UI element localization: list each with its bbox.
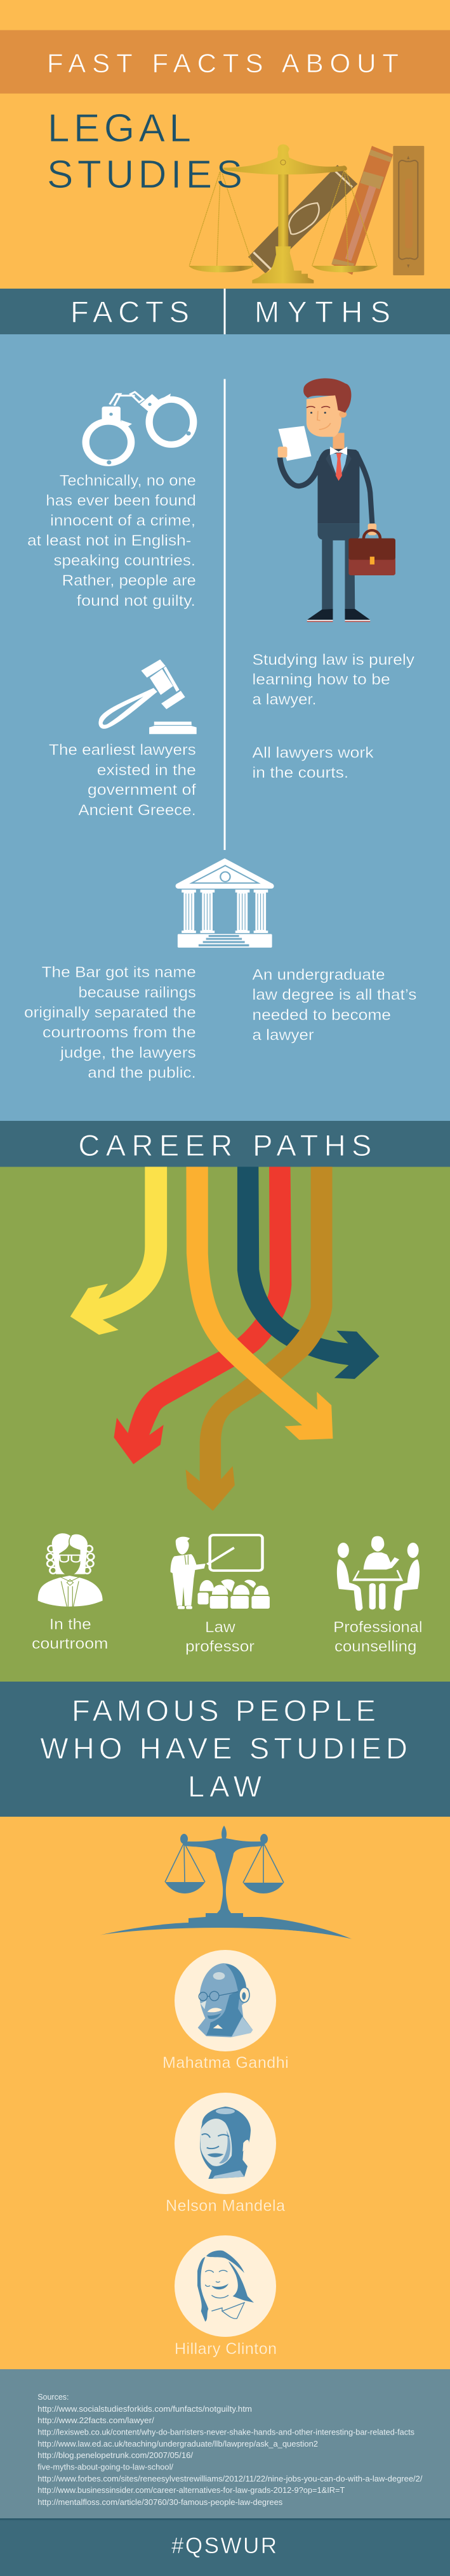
- banner: famous people heading: LAW: [188, 1770, 262, 1803]
- banner: career paths heading: CAREER PATHS: [78, 1128, 371, 1162]
- text: fact three: judge, the lawyers: [60, 1044, 196, 1061]
- text: fact three: because railings: [78, 984, 196, 1001]
- text: fact one: has ever been found: [46, 492, 196, 509]
- text: myth one: Studying law is purely: [252, 651, 414, 669]
- text: fact one: Technically, no one: [60, 472, 196, 489]
- arrow: orange: [186, 1167, 333, 1440]
- panel: famous people: [0, 1817, 450, 2369]
- panel: sources: http://www.businessinsider.com/career-alternatives-for-law-grads-2012-9?op=1&IR=T: [37, 2485, 345, 2495]
- illustration: books and gold scales: [189, 144, 424, 284]
- footer: hashtag: [0, 2518, 450, 2576]
- label: professional counselling: [333, 1619, 423, 1656]
- banner: facts and myths headings: MYTHS: [255, 295, 390, 329]
- text: fact two: The earliest lawyers: [49, 742, 196, 759]
- footer: hashtag: #QSWUR: [171, 2534, 277, 2558]
- icon: professor at board: [171, 1535, 270, 1609]
- text: fact one: found not guilty.: [77, 592, 195, 610]
- text: myth one: a lawyer.: [252, 691, 317, 709]
- text: fact three: originally separated the: [24, 1004, 196, 1021]
- banner: famous people heading: WHO HAVE STUDIED: [40, 1731, 407, 1765]
- portrait: Mahatma Gandhi: [175, 1950, 276, 2051]
- icon: counselling table: [337, 1536, 420, 1611]
- portrait: Nelson Mandela: [175, 2093, 276, 2194]
- panel: sources: http://mentalfloss.com/article/30760/30-famous-people-law-degrees: [37, 2497, 283, 2507]
- panel: career paths: [0, 1167, 450, 1682]
- text: fact three: [24, 964, 196, 1082]
- label: Hillary Clinton: Hillary Clinton: [175, 2340, 277, 2358]
- banner: famous people heading: [0, 1682, 450, 1817]
- panel: sources: http://lexisweb.co.uk/content/why-do-barristers-never-shake-hands-and-other-interesting-bar-related-facts: [37, 2428, 414, 2437]
- arrow: brown: [186, 1167, 333, 1511]
- text: myth three: law degree is all that’s: [252, 986, 416, 1004]
- panel: sources: http://www.22facts.com/lawyer/: [37, 2416, 154, 2425]
- label: in the courtroom: [32, 1616, 108, 1652]
- panel: sources: http://www.law.ed.ac.uk/teaching/undergraduate/llb/lawprep/ask_a_question2: [37, 2439, 318, 2449]
- banner: famous people heading: FAMOUS PEOPLE: [72, 1694, 376, 1727]
- career: law professor: [171, 1535, 270, 1656]
- label: Nelson Mandela: Nelson Mandela: [166, 2197, 285, 2215]
- icon: handcuffs: [86, 392, 194, 464]
- panel: sources: http://www.socialstudiesforkids.com/funfacts/notguilty.htm: [37, 2404, 252, 2414]
- banner: fast facts about: FAST FACTS ABOUT: [47, 48, 399, 78]
- text: fact three: The Bar got its name: [42, 964, 196, 981]
- text: myth three: a lawyer: [252, 1027, 314, 1044]
- text: fact three: courtrooms from the: [43, 1024, 196, 1042]
- label: professional counselling: Professional: [333, 1619, 423, 1636]
- icon: judge with wig: [38, 1533, 103, 1607]
- label: law professor: [185, 1619, 255, 1656]
- icon: blue scales of justice: [96, 1826, 354, 1940]
- text: fact one: innocent of a crime,: [50, 513, 195, 529]
- arrow: red: [114, 1167, 291, 1464]
- text: myth three: needed to become: [252, 1007, 391, 1024]
- text: fact two: [49, 742, 196, 819]
- title: legal studies: [47, 107, 242, 197]
- arrow: dark teal: [237, 1167, 380, 1379]
- icon: gavel: [98, 660, 197, 734]
- panel: sources: [0, 2369, 450, 2519]
- panel: header: [0, 0, 450, 289]
- text: fact one: speaking countries.: [53, 552, 195, 570]
- banner: fast facts about: [0, 30, 450, 94]
- text: fact two: existed in the: [97, 762, 196, 779]
- text: myth two: in the courts.: [252, 764, 348, 781]
- text: fact one: [27, 472, 196, 610]
- banner: facts and myths headings: FACTS: [70, 295, 189, 329]
- panel: facts and myths: [0, 334, 450, 1121]
- chart: crossing career arrows: [70, 1167, 380, 1511]
- text: myth three: An undergraduate: [252, 966, 385, 983]
- text: fact one: at least not in English-: [27, 532, 192, 549]
- title: legal studies: STUDIES: [47, 153, 242, 197]
- text: fact two: government of: [88, 781, 196, 799]
- text: myth one: [252, 651, 414, 709]
- panel: sources: Sources:: [37, 2392, 69, 2402]
- label: in the courtroom: courtroom: [32, 1635, 108, 1652]
- label: Mahatma Gandhi: Mahatma Gandhi: [162, 2054, 289, 2072]
- text: fact three: and the public.: [88, 1064, 196, 1082]
- panel: sources: five-myths-about-going-to-law-school/: [37, 2462, 173, 2472]
- arrow: yellow: [70, 1167, 167, 1335]
- text: fact two: Ancient Greece.: [78, 802, 196, 819]
- text: myth two: [252, 745, 374, 781]
- portrait: Hillary Clinton: [175, 2235, 276, 2337]
- label: law professor: Law: [205, 1619, 235, 1636]
- panel: sources: http://blog.penelopetrunk.com/2007/05/16/: [37, 2450, 193, 2460]
- title: legal studies: LEGAL: [48, 107, 191, 150]
- text: myth three: [252, 966, 416, 1044]
- label: in the courtroom: In the: [50, 1616, 91, 1633]
- text: myth two: All lawyers work: [252, 745, 374, 762]
- label: law professor: professor: [185, 1638, 255, 1656]
- text: myth one: learning how to be: [252, 671, 390, 688]
- banner: facts and myths headings: [0, 289, 450, 334]
- banner: career paths heading: [0, 1121, 450, 1167]
- icon: courthouse: [176, 858, 274, 948]
- career: professional counselling: [333, 1536, 423, 1656]
- text: fact one: Rather, people are: [62, 572, 196, 589]
- panel: sources: http://www.forbes.com/sites/reneesylvestrewilliams/2012/11/22/nine-jobs-you-can-do-with-a-law-degree/2/: [37, 2474, 423, 2483]
- illustration: lawyer with briefcase: [278, 378, 395, 622]
- label: professional counselling: counselling: [334, 1638, 416, 1656]
- career: in the courtroom: [32, 1533, 108, 1652]
